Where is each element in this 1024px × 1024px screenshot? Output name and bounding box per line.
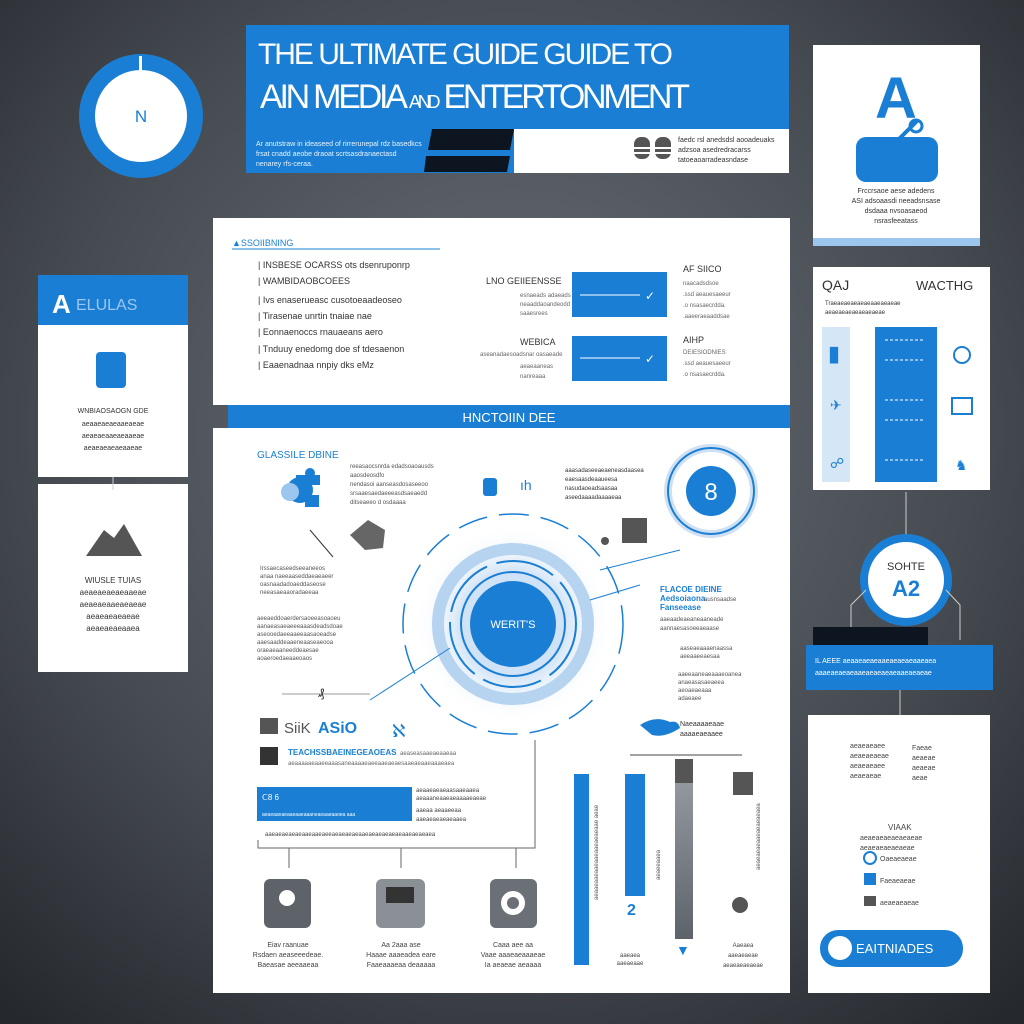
panel: top middle list: | INSBESE OCARSS ots dsenruponrp bbox=[258, 260, 410, 270]
banner: right blue: IL AEEE aeaaeaeaeaaeaeaeaeaaeaea bbox=[815, 658, 936, 665]
panel: top middle list bbox=[213, 218, 790, 405]
card: bottom right bbox=[808, 715, 990, 993]
blue data box: aeaeaanaeaaeaaeaaaneaeaaeaaoea aaa bbox=[262, 812, 355, 818]
panel: main infographic: Irssaecaseedseeaneeos bbox=[260, 566, 325, 572]
icons row: ℵ bbox=[392, 721, 405, 741]
panel: main infographic: oasnaadadoaeddaseose bbox=[260, 582, 326, 588]
card: right QAJ: ☍ bbox=[830, 455, 844, 471]
bar chart: aaeaeaae bbox=[617, 961, 644, 967]
bar chart: aeaeeaaea bbox=[656, 849, 662, 880]
panel: main infographic: aeeaaeeaesaa bbox=[680, 654, 720, 660]
title banner: AIN MEDIA AND ENTERTONMENT bbox=[260, 78, 690, 116]
panel: top middle list: saaesrees bbox=[520, 311, 548, 317]
card: top right A: Frccrsaoe aese adedens bbox=[857, 188, 935, 195]
title banner: tatoeaoarradeasndase bbox=[678, 157, 748, 164]
card: right QAJ bbox=[813, 267, 990, 490]
card: top right A: A bbox=[875, 66, 917, 131]
panel: main infographic: aaseaeaaaenaassa bbox=[680, 646, 733, 652]
card: bottom right: aeaeaeaeaeaeae bbox=[860, 845, 915, 852]
panel: main infographic: aseooedaeeaaeeaasaoeadse bbox=[257, 632, 337, 638]
panel: main infographic: Caaa aee aa bbox=[493, 942, 533, 949]
badge: SOHTE A2: A2 bbox=[892, 576, 920, 601]
panel: main infographic: aaosdeosdfo bbox=[350, 473, 385, 479]
card: left house: aeaeaeaeaeae bbox=[86, 612, 140, 621]
panel: main infographic: adaeaee bbox=[678, 696, 702, 702]
panel: top middle list: .ssd aeauesaeeur bbox=[683, 361, 731, 367]
card: left house bbox=[38, 477, 188, 672]
icon: stacked drums bbox=[634, 137, 671, 159]
card: left house: aeaeaeaeaeaaeae bbox=[80, 588, 147, 597]
icon: blue puzzle figure bbox=[281, 468, 320, 507]
central diagram bbox=[370, 514, 680, 734]
card: right QAJ: ♞ bbox=[955, 457, 968, 473]
panel: top middle list: ✓ bbox=[645, 352, 655, 366]
banner: right blue bbox=[806, 627, 993, 715]
panel: main infographic: Aedsoiaona bbox=[660, 594, 706, 603]
panel: main infographic: nasudaoeadsaasaa bbox=[565, 486, 618, 492]
icon: blue bird bbox=[640, 719, 680, 736]
panel: main infographic: Fanseease bbox=[660, 603, 701, 612]
panel: main infographic: aeeaeddoaerdersaoeeasoaoeu bbox=[257, 616, 340, 622]
card: top right A: nsrasfeeatass bbox=[874, 218, 918, 225]
panel: main infographic: aeaseasaaeaeaaeaa bbox=[400, 751, 457, 757]
card: left A: A bbox=[52, 289, 71, 319]
panel: main infographic: ıh bbox=[520, 477, 532, 493]
panel: main infographic: aaesaaddeaaeneaaseaeooa bbox=[257, 640, 334, 646]
icon: gray cube bbox=[350, 520, 385, 550]
panel: main infographic: Rsdaen aeaseeedeae. bbox=[253, 952, 323, 959]
panel: main infographic: aaasadaseeaeaeneasdaasea bbox=[565, 468, 644, 474]
panel: top middle list: .o nsasaecrdda. bbox=[683, 372, 726, 378]
icon tiles bottom bbox=[264, 879, 537, 928]
pill button bbox=[820, 930, 963, 967]
bar chart: Aaeaea bbox=[733, 943, 754, 949]
panel: main infographic: aeaaeaeaeaasaaeaaea bbox=[416, 788, 480, 794]
panel: main infographic: ausnsaadse bbox=[704, 597, 737, 603]
card: top right A bbox=[813, 45, 980, 246]
card: bottom right: aeaeaeae bbox=[850, 773, 881, 780]
card: right QAJ: WACTHG bbox=[916, 278, 973, 293]
panel: top middle list: naacadsdsoe bbox=[683, 281, 719, 287]
card: bottom right: aeaeaeaee bbox=[850, 743, 885, 750]
panel: main infographic: aeoaeaeaaa bbox=[678, 688, 712, 694]
bar chart: aaeaea bbox=[620, 953, 641, 959]
panel: main infographic: Aa 2aaa ase bbox=[381, 942, 421, 949]
panel: top middle list: | Eaaenadnaa nnpiy dks eMz bbox=[258, 360, 374, 370]
panel: top middle list: .ssd aeauesaeeur bbox=[683, 292, 731, 298]
title banner: Ar anutstraw in ideaseed of rirrerunepal rdz basedkcs bbox=[256, 141, 422, 148]
card: bottom right: Faeaeaeae bbox=[880, 878, 916, 885]
panel: main infographic: TEACHSSBAEINEGEAOEAS bbox=[288, 748, 397, 757]
panel: top middle list: | Tnduuy enedomg doe sf tdesaenon bbox=[258, 344, 404, 354]
panel: main infographic: nendasoi aanseasdosaseeoo bbox=[350, 482, 429, 488]
panel: main infographic: anaeasasaeaeea bbox=[678, 680, 725, 686]
panel: main infographic: reeasaocsnrda edadsoaoausds bbox=[350, 464, 434, 470]
card: left house: WIUSLE TUIAS bbox=[85, 576, 141, 585]
bar chart: ▼ bbox=[676, 942, 690, 958]
card: left house: aeaeaeaeaaea bbox=[86, 624, 140, 633]
icon: number 8 circle: 8 bbox=[704, 479, 718, 506]
panel: main infographic: aeaaaaaeaaeeaaasaneaaaaeaeeaaeaeaesaaeaeaaeaaaeaea bbox=[288, 761, 455, 767]
icon: blue chip bbox=[96, 352, 126, 388]
bar chart: aaeaeaeae bbox=[728, 953, 759, 959]
panel: main infographic: ₰ bbox=[318, 686, 325, 700]
title banner: frsat cnadd aeobe draoat scrtsasdranaectasd bbox=[256, 151, 397, 158]
panel: top middle list: .aaeeraeaaddsae bbox=[683, 314, 730, 320]
panel: main infographic: aaaaeaeaaee bbox=[680, 731, 723, 738]
panel: main infographic: anaa naeeaaseddaeaeaeer bbox=[260, 574, 333, 580]
icon: tag bbox=[483, 478, 497, 496]
card: bottom right: aeaeaeaeae bbox=[880, 900, 919, 907]
panel: main infographic: Baeasae aeeaaeaa bbox=[258, 962, 318, 969]
card: left A: aeaeaeaeaeaaeae bbox=[84, 445, 142, 452]
panel: main infographic: Vaae aaaeaeaaaeae bbox=[481, 952, 545, 959]
panel: top middle list: WEBICA bbox=[520, 337, 556, 347]
bar chart: aeaaeaaeaaeaaeaaeaeaeaae aeae bbox=[594, 804, 600, 900]
icon: number 8 circle bbox=[668, 448, 754, 534]
icons row bbox=[260, 718, 405, 741]
heading bar bbox=[228, 405, 790, 428]
panel: top middle list: | Tirasenae unrtin tnaiae nae bbox=[258, 311, 372, 321]
panel: main infographic bbox=[213, 428, 790, 993]
title banner: faedc rsl anedsdsl aooadeuaks bbox=[678, 137, 775, 144]
panel: top middle list: AIHP bbox=[683, 335, 704, 345]
central diagram: WERIT'S bbox=[491, 619, 535, 631]
icons row: SiiK bbox=[284, 720, 311, 737]
badge: SOHTE A2 bbox=[851, 492, 960, 640]
panel: main infographic: Ia aeaeae aeaaaa bbox=[485, 962, 541, 969]
panel: top middle list: DEIESIODNIES bbox=[683, 350, 726, 356]
panel: top middle list: | Ivs enaserueasc cusotoeaadeoseo bbox=[258, 295, 402, 305]
bar chart: aeaeaeaeaeae bbox=[723, 963, 764, 969]
card: top right A: dsdaaa nvsoasaeod bbox=[865, 208, 927, 215]
badge: SOHTE A2: SOHTE bbox=[887, 561, 925, 573]
card: top right A: ASI adsoaasdi neeadsnsase bbox=[852, 198, 940, 205]
panel: top middle list: AF SIICO bbox=[683, 264, 722, 274]
panel: main infographic: Eiav raanuae bbox=[267, 942, 309, 949]
icons row: ASiO bbox=[318, 720, 357, 737]
card: left A: aeaeaeaaeaeaaeae bbox=[82, 433, 144, 440]
panel: main infographic: ditseaeeo d osdaaaa bbox=[350, 500, 406, 506]
card: left house: aeaeaeaaeaeaeae bbox=[80, 600, 147, 609]
panel: main infographic: aaeaadeaeaneaaneade bbox=[660, 617, 724, 623]
card: right QAJ: QAJ bbox=[822, 277, 849, 293]
card: bottom right: aeae bbox=[912, 775, 928, 782]
panel: top middle list: nanreaaa bbox=[520, 374, 546, 380]
panel: main infographic: srsaaesaedaeeeasdsaeaedd bbox=[350, 491, 427, 497]
card: right QAJ: ✈ bbox=[830, 397, 842, 413]
panel: main infographic: aaeeaaneaeaaaeoanea bbox=[678, 672, 742, 678]
card: left A: aeaaeaeaeaaeaeae bbox=[82, 421, 144, 428]
panel: main infographic: Faaeaaaeaa deaaaaa bbox=[367, 962, 435, 969]
panel: main infographic: FLACOE DIEINE bbox=[660, 585, 722, 594]
panel: top middle list: aseanadaesoadsnar oasaeade bbox=[480, 352, 563, 358]
panel: main infographic: aaeaeaeaeaeaaea bbox=[416, 817, 467, 823]
panel: main infographic: aseedaaaadaaaaeaa bbox=[565, 495, 622, 501]
blue data box: ᑕ8 6 bbox=[262, 793, 280, 802]
card: bottom right: aeaeae bbox=[912, 765, 935, 772]
blue data box bbox=[257, 787, 412, 821]
bar chart: 2 bbox=[627, 902, 636, 919]
heading bar: HNCTOIIN DEE bbox=[463, 410, 556, 425]
card: bottom right: aeaeaeaeae bbox=[850, 753, 889, 760]
icon: top-left circle badge bbox=[79, 54, 203, 178]
card: left A bbox=[38, 275, 188, 477]
panel: main infographic: aoaeroedaeaaeoaos bbox=[257, 656, 312, 662]
card: right QAJ: aeaeaeaeaeaeaeaeae bbox=[825, 310, 886, 316]
panel: top middle list: aeaeaaneas bbox=[520, 364, 553, 370]
panel: main infographic: GLASSILE DBINE bbox=[257, 450, 339, 461]
bar chart bbox=[574, 755, 764, 969]
panel: top middle list: ▲SSOIIBNING bbox=[232, 238, 293, 248]
bar chart: aeaeaeaeaaeaeaeaeaea bbox=[756, 803, 762, 870]
panel: main infographic: Haaae aaaeadea eare bbox=[366, 952, 436, 959]
panel: main infographic: aeaaaneaaeaeaaaaeaeae bbox=[416, 796, 487, 802]
title text: THE ULTIMATE GUIDE GUIDE TO bbox=[258, 38, 673, 71]
title banner bbox=[246, 25, 789, 173]
card: left A: WNBIAOSAOGN GDE bbox=[78, 408, 149, 415]
panel: main infographic: aanaeasaeaeeeaaasdeadsdoae bbox=[257, 624, 343, 630]
panel: main infographic: aaeaa aeaaeeaa bbox=[416, 808, 462, 814]
title banner: nenarey rfs-ceraa. bbox=[256, 161, 313, 168]
card: bottom right: aeaeaeaeaeaeaeae bbox=[860, 835, 922, 842]
card: bottom right: Faeae bbox=[912, 745, 932, 752]
panel: top middle list: LNO GEIIEENSSE bbox=[486, 276, 562, 286]
banner: right blue: aaaeaeaeaeaaeaeaeaeaeaaeaeaeae bbox=[815, 670, 932, 677]
icon: top-left circle badge: N bbox=[135, 107, 147, 126]
panel: main infographic: oraeaeaaneeddeaesae bbox=[257, 648, 319, 654]
card: bottom right: aeaeae bbox=[912, 755, 935, 762]
panel: main infographic: aannaesasoeeaeaase bbox=[660, 626, 720, 632]
card: right QAJ: ▊ bbox=[829, 346, 841, 364]
panel: top middle list: neaaddaoandeodd bbox=[520, 302, 570, 308]
panel: top middle list: | Eonnaenoccs rnauaeans aero bbox=[258, 327, 383, 337]
card: left A: ELULAS bbox=[76, 297, 137, 314]
title banner: adzsoa asedredracarss bbox=[678, 147, 751, 154]
card: bottom right: EAITNIADES bbox=[856, 941, 934, 956]
card: right QAJ: Traeaeaeaeaeaeaaeaeaeae bbox=[825, 301, 901, 307]
panel: main infographic: eaesaasdeaaueesa bbox=[565, 477, 618, 483]
panel: main infographic: aaeaeaeaeaeaaeaaeaeeaeaeaeaeaaeaeaeaeaeaeaaeaeaeaea bbox=[265, 832, 436, 838]
panel: top middle list: .o nsasaecrdda. bbox=[683, 303, 726, 309]
card: bottom right: VIAAK bbox=[888, 823, 912, 832]
panel: main infographic: neeasaeaaoradaeeaa bbox=[260, 590, 319, 596]
panel: top middle list: | WAMBIDAOBCOEES bbox=[258, 276, 350, 286]
card: bottom right: Oaeaeaeae bbox=[880, 856, 917, 863]
panel: top middle list: esnaeads adaeads bbox=[520, 293, 571, 299]
panel: main infographic: Naeaaaaeaae bbox=[680, 721, 724, 728]
panel: top middle list: ✓ bbox=[645, 289, 655, 303]
card: bottom right: aeaeaeaee bbox=[850, 763, 885, 770]
